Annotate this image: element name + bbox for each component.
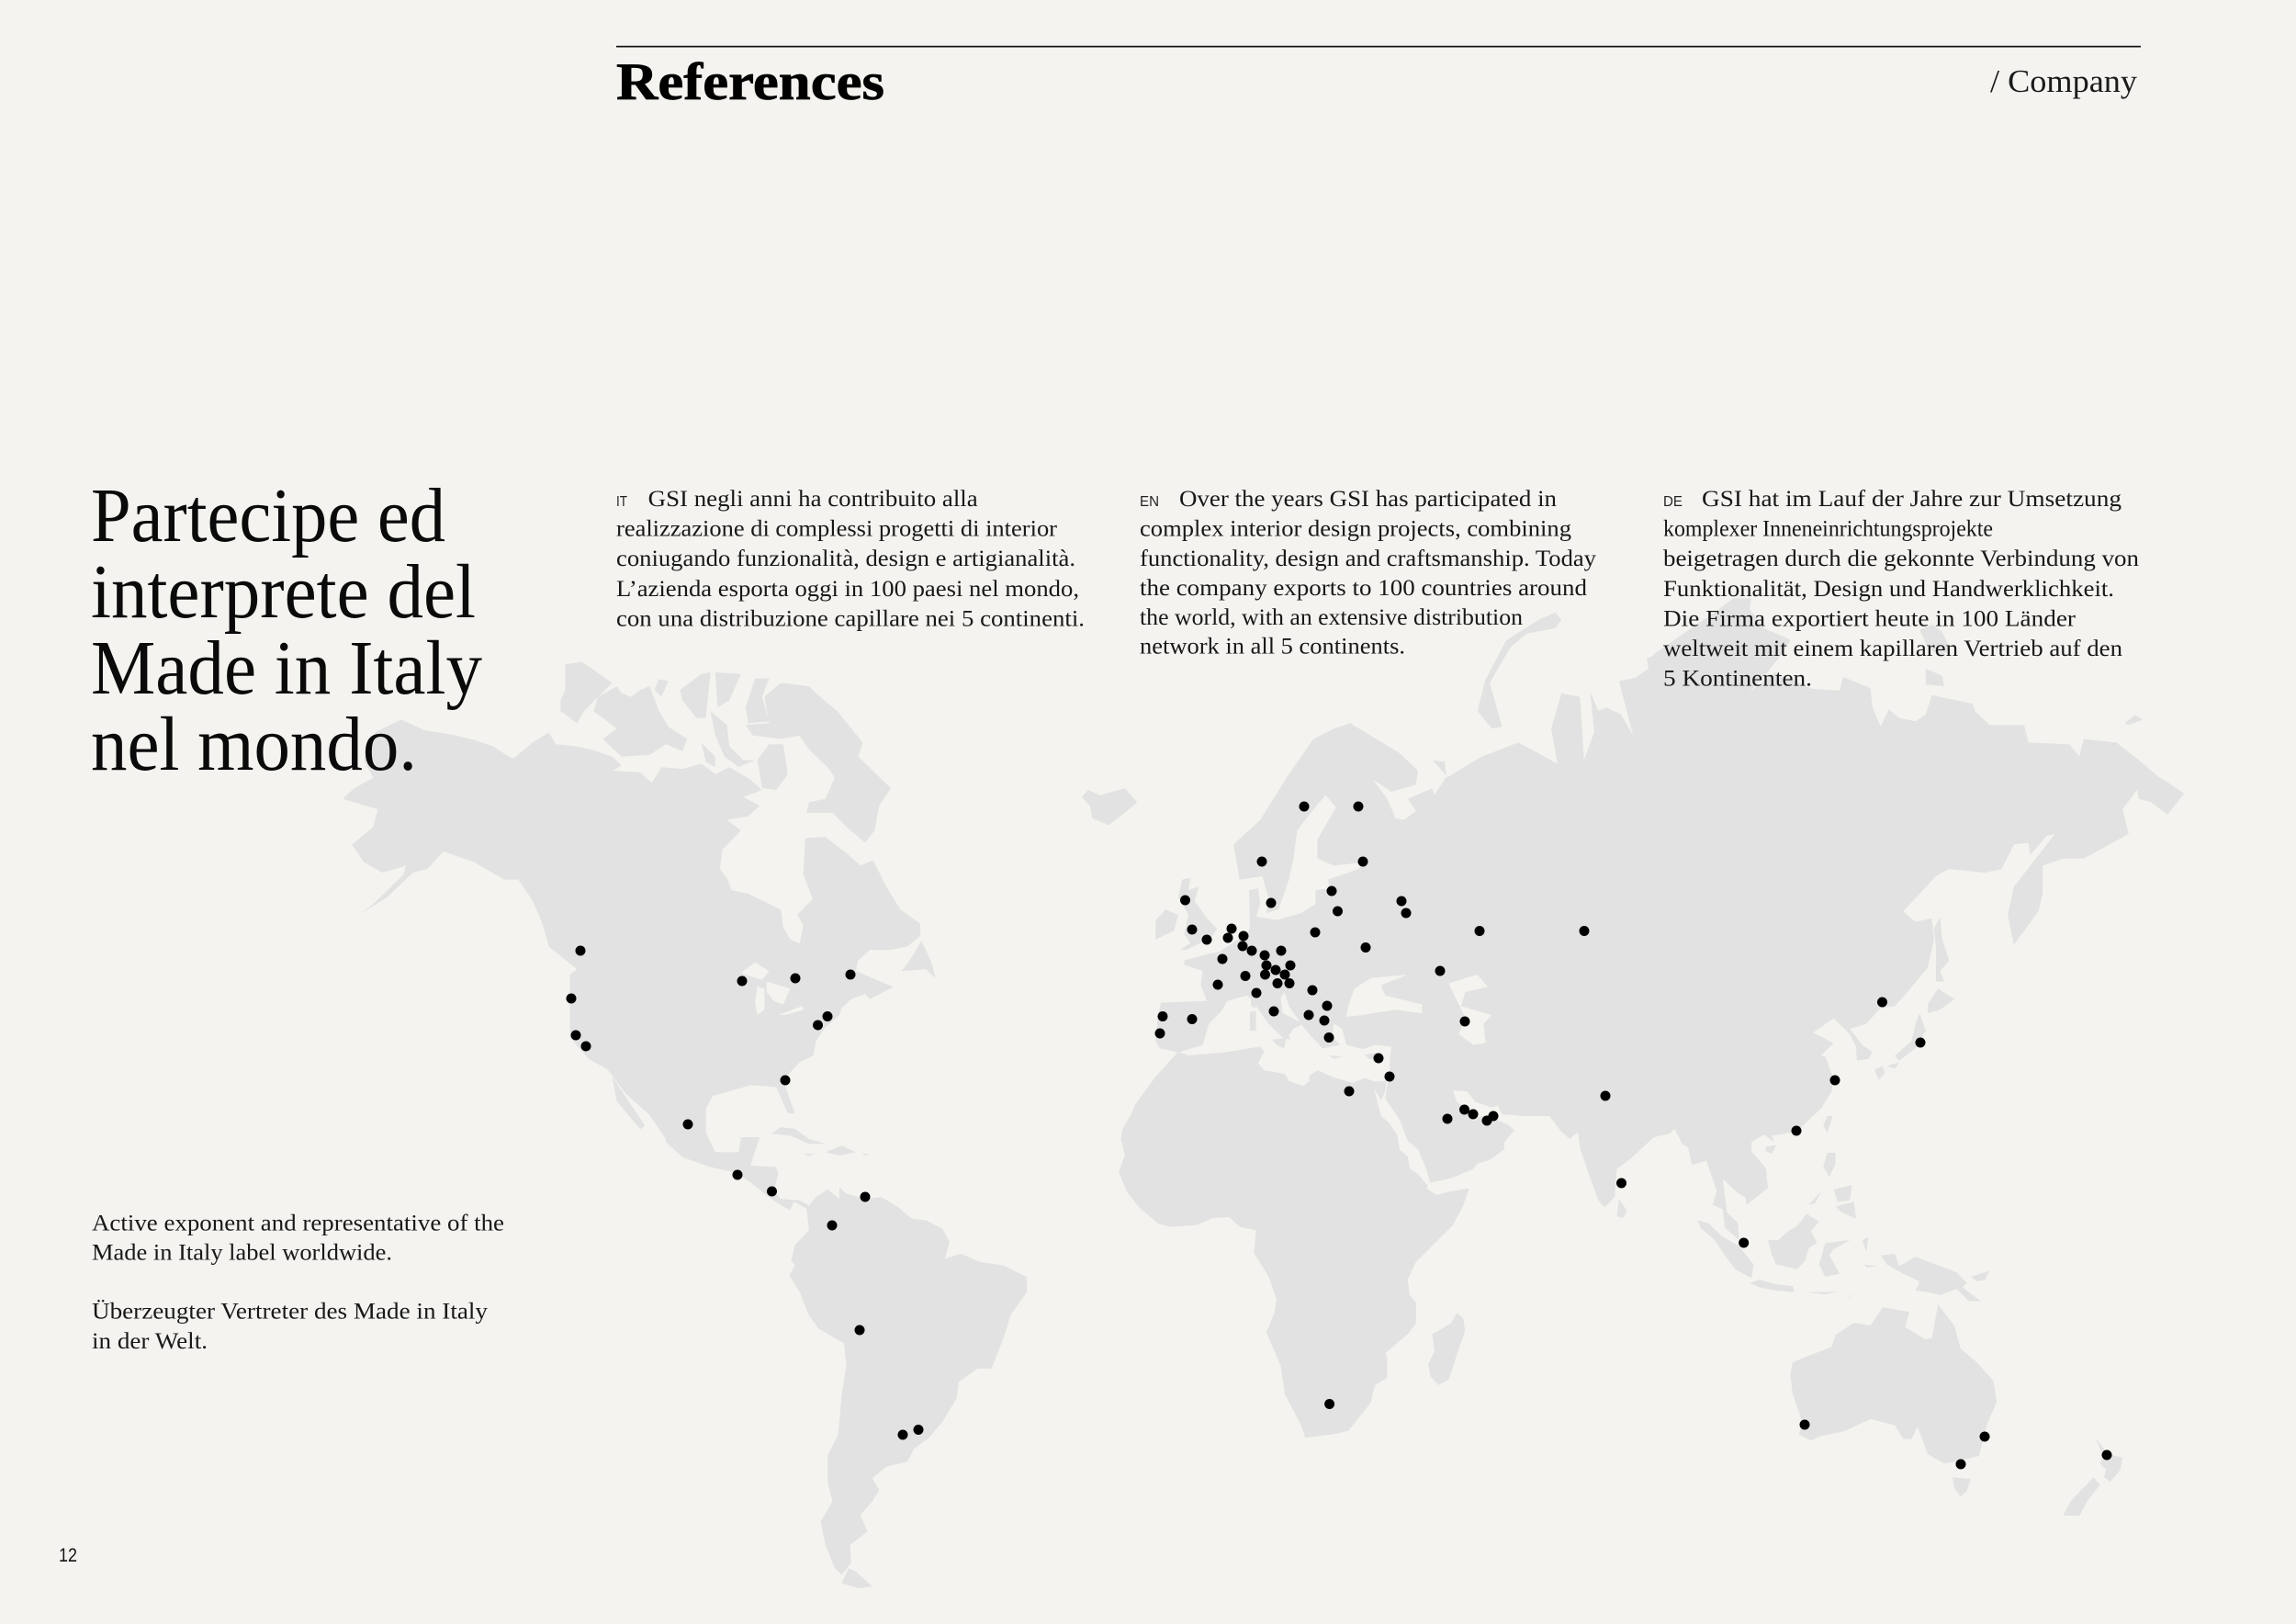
text block: Italian: realizzazione di complessi progetti di interior [616,517,1058,542]
text block: tagline English and German: in der Welt. [92,1329,208,1354]
inland seas [1346,975,1491,1045]
text block: English: network in all 5 continents. [1140,634,1405,660]
text block: Italian: L’azienda esporta oggi in 100 paesi nel mondo, [616,577,1079,602]
text block: English: complex interior design projects, combining [1140,517,1572,542]
text block: tagline English and German: Active exponent and representative of the [92,1211,504,1236]
text block: German: 5 Kontinenten. [1663,667,1812,692]
text block: Italian: IT [616,494,627,510]
text block: English [1140,487,1597,660]
page number: 12 [59,1545,77,1566]
main heading: nel mondo. [91,702,417,787]
text block: German: GSI hat im Lauf der Jahre zur Umsetzung [1702,487,2122,512]
text block: Italian: con una distribuzione capillare nei 5 continenti. [616,606,1085,631]
text block: German [1663,487,2140,692]
text block: Italian [616,487,1085,631]
land: eurasia [1082,598,2184,1240]
text block: tagline English and German: Made in Italy label worldwide. [92,1240,392,1266]
land: australia [1791,1304,1997,1463]
title: References: References [616,53,884,111]
main heading: interprete del [91,549,476,635]
text block: Italian: GSI negli anni ha contribuito alla [648,487,978,512]
text block: German: komplexer Inneneinrichtungsprojekte [1663,517,1993,542]
land: north america [343,661,936,1139]
land: southeast asia and oceania [1697,1153,2122,1516]
text block: German: DE [1663,494,1683,510]
section label: Company: / Company [1990,63,2138,99]
text block: German: beigetragen durch die gekonnte Verbindung von [1663,547,2140,571]
text block: English: EN [1140,494,1159,510]
city location dots [566,801,2112,1470]
text block: German: Die Firma exportiert heute in 100 Länder [1663,606,2077,631]
great lakes and inland water [741,765,821,1015]
land: central and south america [640,1102,1027,1588]
text block: English: the world, with an extensive distribution [1140,605,1524,630]
text block: Italian: coniugando funzionalità, design e artigianalità. [616,547,1075,571]
land: africa [1119,1046,1469,1438]
world map [343,598,2184,1588]
text block: German: weltweit mit einem kapillaren Vertrieb auf den [1663,637,2123,661]
main heading: Made in Italy [91,626,482,711]
header rule [616,46,2141,48]
main heading: Partecipe ed [91,473,445,558]
text block: German: Funktionalität, Design und Handwerklichkeit. [1663,577,2114,602]
text block: English: Over the years GSI has participated in [1179,487,1558,512]
main heading [91,473,482,787]
text block: English: the company exports to 100 countries around [1140,576,1588,601]
text block: tagline English and German: Überzeugter Vertreter des Made in Italy [92,1299,489,1325]
text block: tagline English and German [92,1211,504,1354]
text block: English: functionality, design and craftsmanship. Today [1140,547,1597,571]
